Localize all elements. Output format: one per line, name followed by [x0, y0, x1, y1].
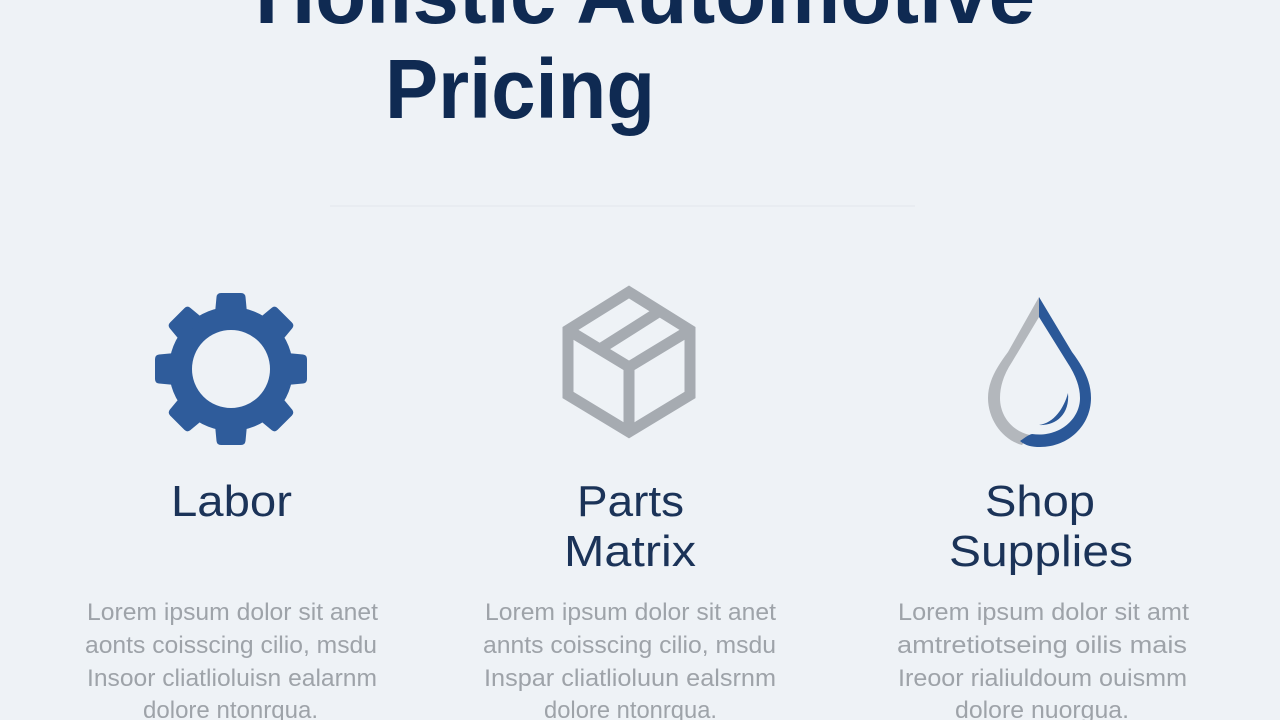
heading: labor: Labor	[171, 477, 292, 526]
text block: shop supplies	[897, 599, 1189, 720]
text block: shop supplies: Ireoor rialiuldoum ouismm	[898, 665, 1187, 692]
text block: labor: aonts coisscing cilio, msdu	[85, 632, 377, 659]
heading: parts matrix	[564, 477, 696, 576]
panel: labor	[85, 293, 378, 720]
text block: labor: Lorem ipsum dolor sit anet	[87, 599, 378, 626]
title: Pricing	[385, 42, 655, 136]
icon: water drop	[988, 297, 1091, 447]
text block: shop supplies: amtretiotseing oilis mais	[897, 632, 1187, 659]
panel: shop supplies	[897, 297, 1189, 720]
icon: box	[568, 292, 690, 432]
heading: shop supplies: Supplies	[949, 527, 1133, 576]
text block: parts matrix	[483, 599, 776, 720]
text block: parts matrix: Inspar cliatlioluun ealsrnm	[484, 665, 776, 692]
heading: shop supplies	[949, 477, 1133, 576]
heading: parts matrix: Matrix	[564, 527, 696, 576]
title	[255, 0, 1035, 136]
panel: parts matrix	[483, 292, 776, 720]
icon: gear	[155, 293, 307, 445]
text block: parts matrix: Lorem ipsum dolor sit anet	[485, 599, 776, 626]
heading: shop supplies: Shop	[985, 477, 1095, 526]
heading: parts matrix: Parts	[577, 477, 684, 526]
text block: shop supplies: Lorem ipsum dolor sit amt	[898, 599, 1189, 626]
text block: labor	[85, 599, 378, 720]
text block: labor: Insoor cliatlioluisn ealarnm	[87, 665, 377, 692]
text block: parts matrix: annts coisscing cilio, msdu	[483, 632, 776, 659]
